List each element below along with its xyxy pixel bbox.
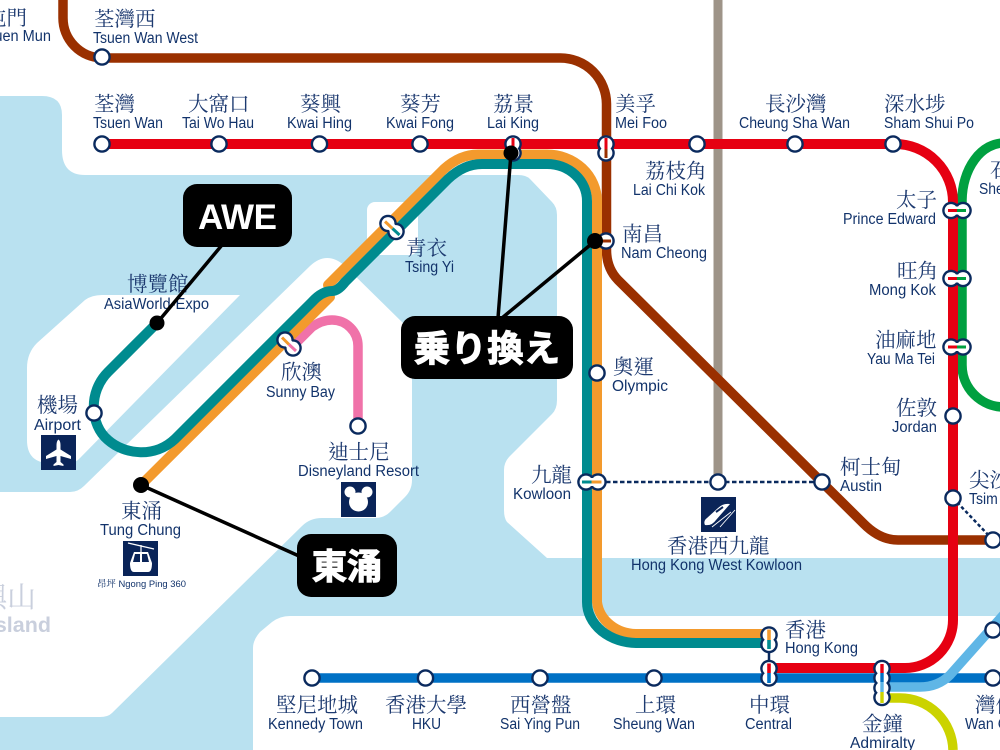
station labels: Sai Ying Pun [500, 716, 580, 733]
station labels: Jordan [892, 419, 937, 436]
station labels: Yau Ma Tei [867, 351, 935, 368]
line: Tung Chung line, upper [328, 154, 769, 634]
callout: 乗り換え: 乗り換え [414, 328, 560, 369]
station labels: 佐敦 [896, 397, 937, 420]
station labels: 葵興 [300, 93, 342, 116]
station labels: 香港大學 [385, 694, 467, 717]
station labels: Hong Kong [785, 640, 858, 657]
station labels: 東涌 [121, 500, 162, 523]
interchange: Tsing Yi [379, 215, 405, 240]
interchange: Nam Cheong [597, 232, 615, 250]
station labels: 葵芳 [400, 93, 441, 116]
station labels: 荔枝角 [645, 160, 706, 183]
station labels: Kwai Fong [386, 115, 454, 132]
station labels: 長沙灣 [765, 93, 827, 116]
interchange: Hong Kong [760, 626, 778, 653]
station labels: Sunny Bay [266, 384, 335, 401]
station labels: Kowloon [513, 486, 571, 503]
line: Tseung Kwan O line [882, 612, 1000, 687]
station labels: 昂坪 Ngong Ping 360 [97, 576, 186, 590]
callout: AWE [150, 184, 292, 330]
line: South Island line [882, 698, 953, 750]
line: Airport Express [94, 164, 769, 643]
station labels: HKU [412, 716, 441, 733]
station labels: Kennedy Town [268, 716, 363, 733]
station labels: 香港西九龍 [667, 535, 770, 558]
station labels: Central [745, 716, 792, 733]
station labels: 奧運 [613, 356, 654, 379]
station labels: Kwai Hing [287, 115, 352, 132]
station labels: 博覽館 [127, 273, 188, 296]
icon: cable car [123, 541, 158, 576]
interchange: Prince Edward [942, 202, 972, 219]
station labels: 太子 [896, 189, 937, 212]
station labels: 青衣 [406, 237, 447, 260]
callout: 乗り換え [401, 146, 603, 379]
station labels: 中環 [749, 694, 790, 717]
land: Hong Kong Island [253, 616, 1000, 750]
interchange: Kowloon [577, 473, 607, 491]
station labels: 欣澳 [281, 361, 322, 384]
station labels: 香港 [785, 619, 826, 642]
land: Lantau Island [0, 258, 412, 717]
dotted link: Tsim Sha Tsui to East Tsim Sha Tsui [953, 498, 993, 540]
land: Tsing Yi [367, 202, 418, 255]
station labels: 機場 [37, 394, 78, 417]
station labels: 荔景 [493, 93, 534, 116]
station labels: Tsuen Wan [93, 115, 163, 132]
station labels: Disneyland Resort [298, 463, 420, 480]
station labels: AsiaWorld-Expo [104, 296, 209, 313]
station labels: 荃灣西 [94, 8, 156, 31]
interchange: Lai King [504, 135, 522, 162]
line: high speed rail [714, 0, 722, 482]
station labels: Lai Chi Kok [633, 182, 705, 199]
station labels: Tsuen Wan West [93, 30, 199, 47]
stations [86, 49, 1000, 686]
line: Island line [312, 673, 1000, 683]
station labels: Tsing Yi [405, 259, 454, 276]
station labels: 南昌 [622, 223, 663, 246]
interchange: Mong Kok [942, 270, 972, 287]
line: Tsuen Wan line [102, 144, 953, 668]
station labels: Prince Edward [843, 211, 936, 228]
station labels: Hong Kong West Kowloon [631, 557, 802, 574]
interchange: Sunny Bay [276, 331, 302, 357]
station labels: Sham Shui Po [884, 115, 974, 132]
station labels: 西營盤 [510, 694, 572, 717]
station labels: 油麻地 [875, 329, 936, 352]
station labels: 上環 [635, 694, 676, 717]
place label: Lantau Island [0, 581, 51, 637]
station labels: 迪士尼 [328, 441, 390, 464]
station labels: 荃灣 [94, 93, 135, 116]
station labels: Austin [840, 478, 882, 495]
icon: airport [41, 435, 76, 470]
station labels: Olympic [612, 378, 668, 395]
dotted link: Kowloon to Austin [592, 481, 822, 483]
station labels: 旺角 [897, 260, 938, 283]
station labels: Lai King [487, 115, 539, 132]
line: Kwun Tong line [962, 143, 1000, 407]
station labels: 金鐘 [862, 713, 903, 736]
station labels: Nam Cheong [621, 245, 707, 262]
station labels: 堅尼地城 [276, 694, 358, 717]
station labels: Cheung Sha Wan [739, 115, 850, 132]
interchange: Admiralty [873, 660, 891, 706]
station labels: Mong Kok [869, 282, 936, 299]
land: airport island [27, 295, 240, 463]
line: Tuen Ma line [63, 0, 993, 540]
station labels: Airport [34, 417, 82, 434]
interchange: Mei Foo [597, 135, 615, 162]
land: Kowloon and New Territories [0, 0, 1000, 558]
station labels: Mei Foo [615, 115, 667, 132]
station labels: Tung Chung [100, 522, 181, 539]
callout: AWE: AWE [198, 198, 277, 237]
station labels: 深水埗 [884, 93, 946, 116]
line: Disneyland Resort line [290, 320, 358, 426]
interchange: Yau Ma Tei [942, 338, 972, 356]
icon: Disneyland Mickey [341, 482, 376, 517]
callout: 東涌 [133, 477, 397, 597]
link: Hong Kong to Central [768, 650, 770, 660]
interchange: Central [760, 660, 778, 687]
icon: high speed train [701, 497, 736, 532]
station labels: 九龍 [531, 464, 572, 487]
station labels: 柯士甸 [840, 456, 902, 479]
line: Tung Chung line, lower [141, 297, 330, 485]
station labels: 美孚 [615, 93, 656, 116]
station labels: Tai Wo Hau [182, 115, 254, 132]
station labels: Sheung Wan [613, 716, 695, 733]
station labels: 大窩口 [188, 93, 250, 116]
callout: 東涌: 東涌 [312, 548, 382, 587]
